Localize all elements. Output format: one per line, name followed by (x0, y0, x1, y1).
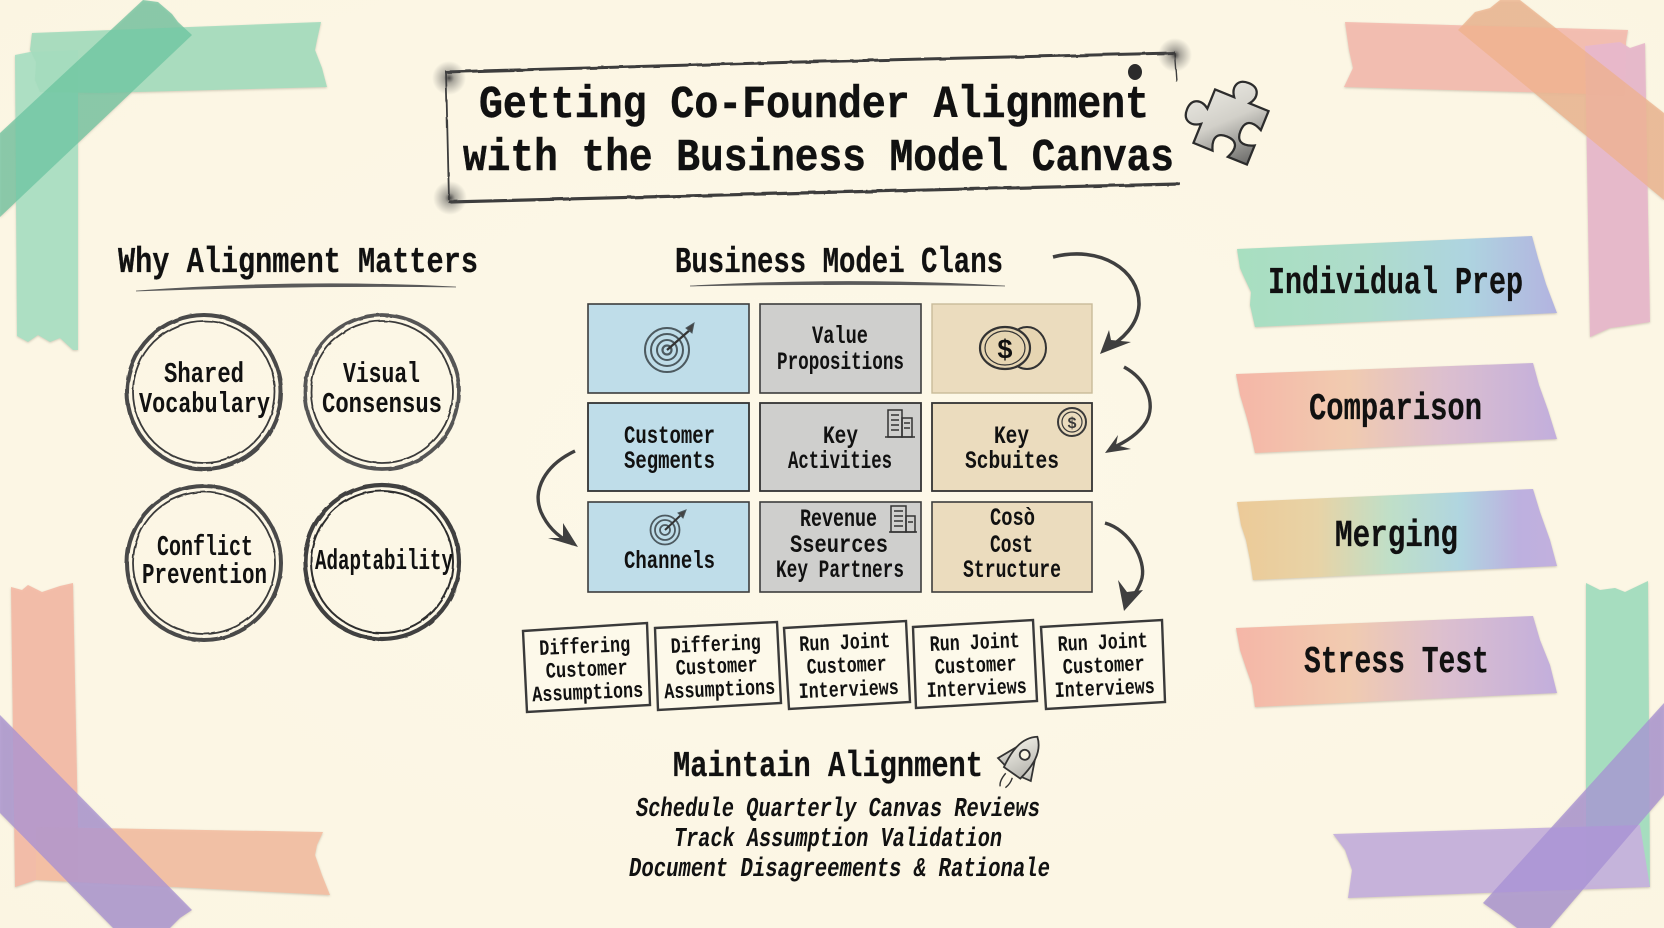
decoration: bottom-left peach washi tape (0, 583, 330, 928)
step: comparison: Comparison (1309, 388, 1482, 431)
title text (463, 80, 1174, 184)
note: run joint customer interviews 1: Run Joint (799, 629, 891, 658)
circle: adaptability (305, 485, 459, 639)
arrow: left curve (538, 451, 578, 547)
note: run joint customer interviews 3: Customer (1062, 652, 1145, 681)
note: differing customer assumptions 2 (655, 622, 781, 710)
heading: business model clans: Business Modei Clans (675, 242, 1003, 283)
heading: why alignment matters: Why Alignment Matters (118, 242, 478, 283)
cell: key scbuites: Scbuites (965, 447, 1059, 476)
cell: key scbuites: Key (994, 422, 1029, 451)
cell: value propositions (760, 304, 921, 393)
icon: small target (650, 510, 686, 544)
step: merging (1237, 489, 1557, 580)
title text: Getting Co-Founder Alignment (479, 80, 1149, 131)
note: run joint customer interviews 2: Interviews (926, 675, 1027, 704)
cell: channels (588, 502, 749, 592)
note: differing customer assumptions 2: Differing (670, 631, 761, 660)
icon: target (645, 323, 694, 372)
panel: maintain alignment (629, 725, 1054, 885)
note: differing customer assumptions 2: Assumptions (664, 676, 776, 705)
note: differing customer assumptions 2: Customer (675, 653, 758, 682)
icon: office building (889, 506, 917, 532)
note: differing customer assumptions 1: Customer (545, 656, 628, 685)
text: schedule quarterly canvas reviews: Schedule Quarterly Canvas Reviews (636, 795, 1040, 825)
note: differing customer assumptions 1 (523, 623, 650, 712)
note: run joint customer interviews 3: Run Joint (1057, 629, 1148, 658)
title block (432, 38, 1192, 215)
circle: conflict prevention: Conflict (157, 531, 253, 564)
note: differing customer assumptions 1: Differing (539, 633, 631, 662)
cell: key activities (760, 403, 921, 491)
heading underline (690, 282, 1005, 286)
arrow: middle right curve (1105, 367, 1150, 453)
cell: revenue sources key partners: Revenue (800, 505, 877, 534)
icon: rocket (985, 725, 1054, 799)
icon: coins: $ (997, 337, 1013, 367)
note: differing customer assumptions 1: Assumptions (532, 679, 644, 708)
circle: shared vocabulary: Shared (164, 358, 244, 391)
icon: small coin (1058, 408, 1086, 436)
icon: coins (980, 327, 1046, 369)
note: run joint customer interviews 3 (1041, 620, 1165, 709)
panel: business model canvas (523, 242, 1165, 712)
step: comparison (1236, 363, 1557, 453)
circle: adaptability: Adaptability (315, 545, 453, 578)
circle: visual consensus: Consensus (322, 388, 442, 421)
cell: customer segments: Customer (624, 422, 715, 451)
note: run joint customer interviews 2 (913, 620, 1037, 708)
circle: visual consensus: Visual (343, 358, 420, 391)
cell: customer target icon (588, 304, 749, 393)
cell: customer segments (588, 403, 749, 491)
heading: maintain alignment: Maintain Alignment (673, 746, 983, 787)
icon: building (885, 410, 915, 437)
heading underline (136, 284, 456, 291)
cell: cost structure: Structure (963, 556, 1061, 585)
panel: why alignment matters (118, 242, 478, 640)
cell: cost structure (932, 502, 1092, 592)
cell: key activities: Activities (788, 447, 892, 476)
icon: puzzle piece (1176, 65, 1275, 165)
note: run joint customer interviews 3: Interviews (1054, 675, 1155, 704)
cell: cost structure: Cost (990, 531, 1033, 560)
cell: key activities: Key (823, 422, 858, 451)
title frame (432, 38, 1192, 215)
cell: customer segments: Segments (624, 447, 715, 476)
note: run joint customer interviews 1: Interviews (798, 676, 899, 705)
circle: conflict prevention (127, 486, 281, 640)
circle: shared vocabulary: Vocabulary (139, 388, 270, 421)
panel: process steps (1236, 236, 1557, 707)
step: individual prep: Individual Prep (1268, 262, 1523, 305)
note: run joint customer interviews 1 (784, 621, 910, 709)
cell: revenue sources key partners: Sseurces (790, 531, 888, 560)
circle: shared vocabulary (127, 315, 281, 469)
decoration: top-left green washi tape (0, 0, 327, 350)
cell: revenue sources key partners: Key Partners (776, 556, 904, 585)
note: run joint customer interviews 1: Customer (806, 652, 887, 681)
circle: conflict prevention: Prevention (142, 559, 267, 592)
cell: revenue sources key partners (760, 502, 921, 592)
step: individual prep (1237, 236, 1557, 327)
arrow: top right curve (1053, 254, 1139, 354)
decoration: bottom-right green and purple washi tape (1333, 581, 1664, 928)
note: run joint customer interviews 2: Run Joint (929, 629, 1020, 658)
cell: value propositions: Propositions (777, 348, 904, 377)
text: track assumption validation: Track Assumption Validation (674, 825, 1002, 855)
title text: with the Business Model Canvas (463, 133, 1174, 184)
sticky note row (523, 620, 1165, 712)
cell: cost structure: Cosò (990, 504, 1035, 533)
step: merging: Merging (1335, 515, 1458, 558)
decoration: top-right pink washi tape (1344, 0, 1664, 337)
arrow: lower right curve (1105, 523, 1143, 611)
step: stress test (1236, 616, 1557, 707)
cell: value propositions: Value (812, 322, 868, 351)
circle: visual consensus (305, 315, 459, 469)
step: stress test: Stress Test (1304, 641, 1489, 684)
cell: channels: Channels (624, 547, 715, 576)
note: run joint customer interviews 2: Customer (934, 652, 1017, 681)
icon: small coin: $ (1067, 415, 1077, 433)
cell: key scbuites (932, 403, 1092, 491)
text: document disagreements and rationale: Document Disagreements & Rationale (629, 855, 1050, 885)
cell: coins icon (932, 304, 1092, 393)
